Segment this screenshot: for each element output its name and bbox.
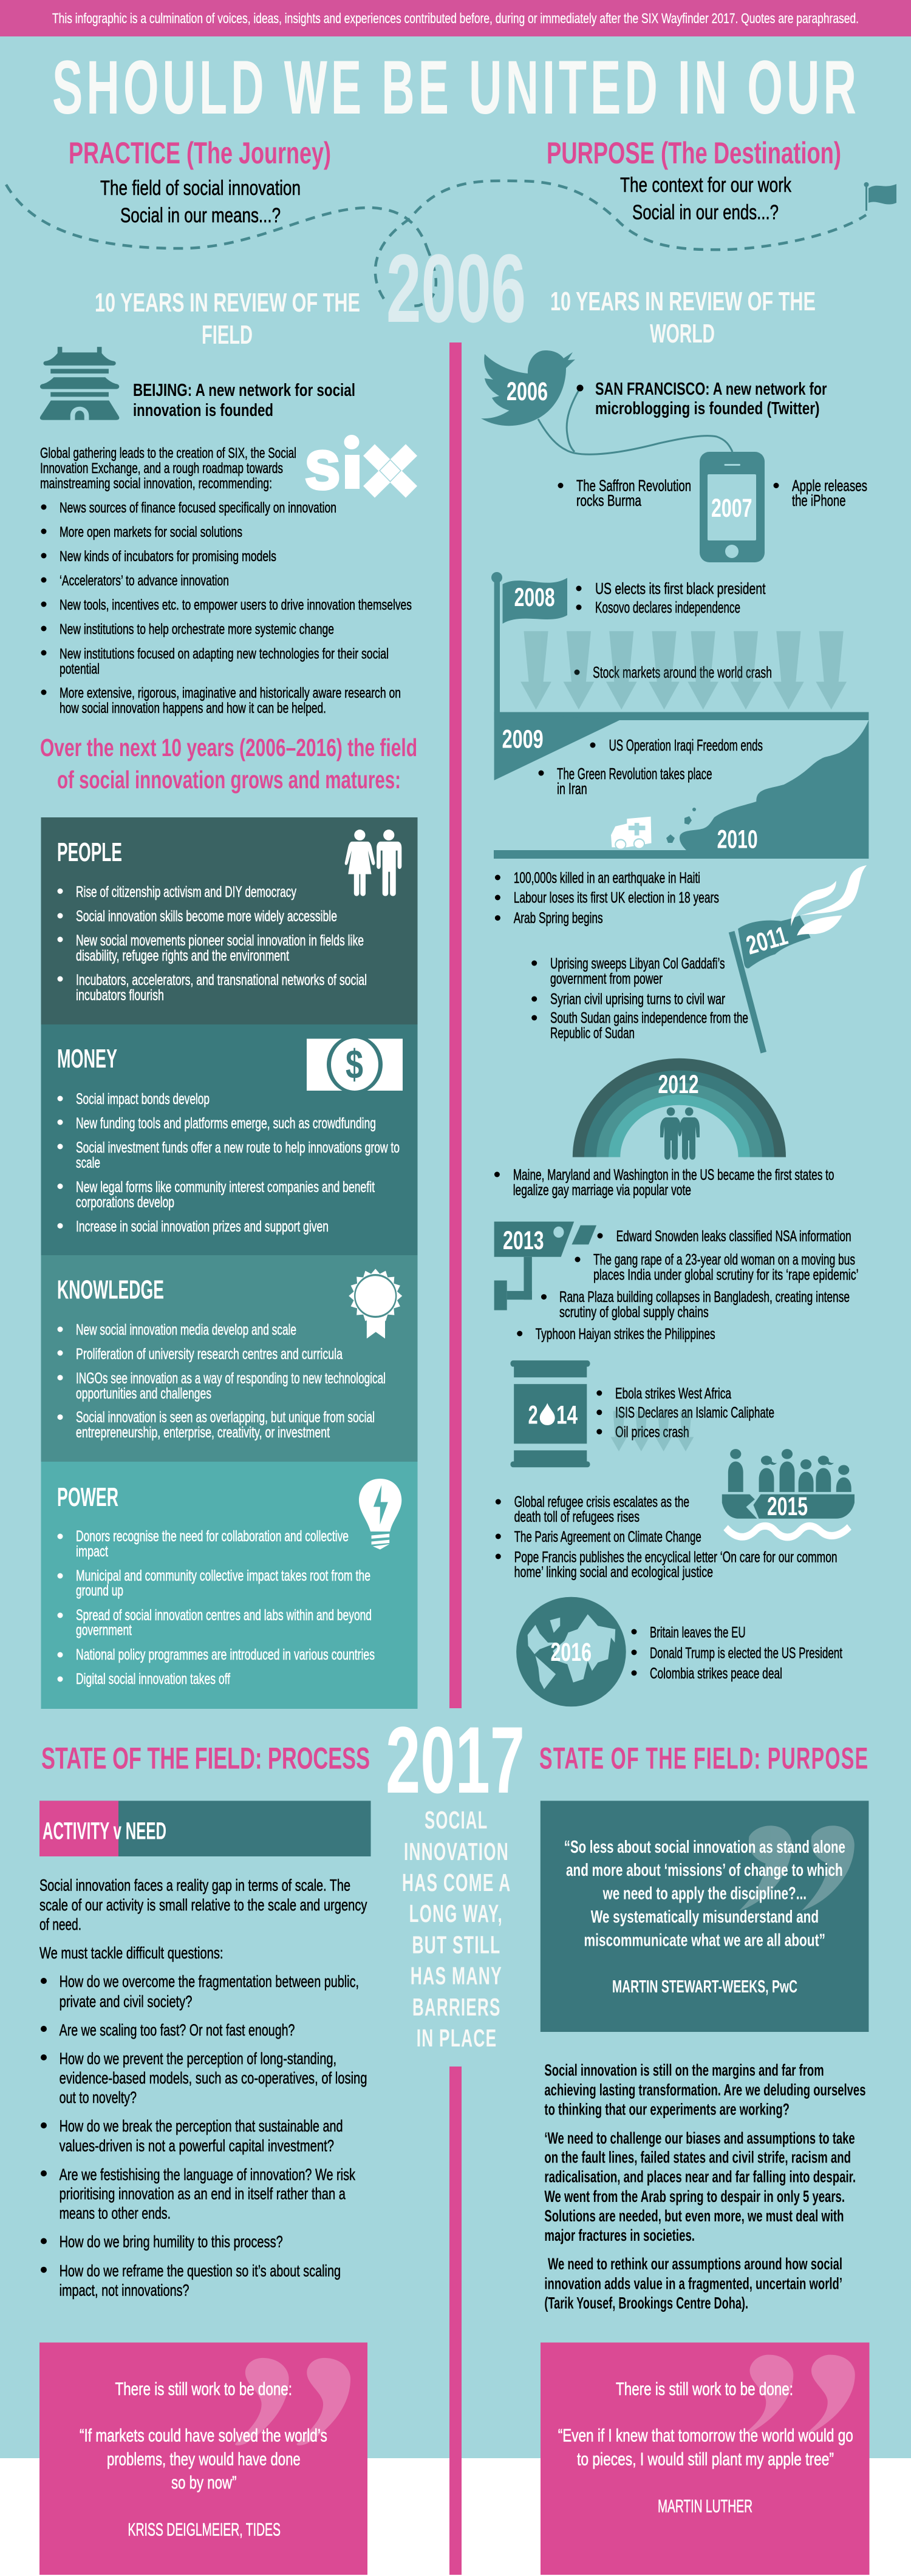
text: Beijing: BEIJING: A new network for social xyxy=(133,381,355,400)
list: difficult questions: How do we bring humility to this process? xyxy=(60,2233,283,2251)
quote text xyxy=(80,2379,327,2540)
list: people: disability, refugee rights and the environment xyxy=(76,947,289,964)
quote text xyxy=(558,2379,853,2516)
text: Beijing: innovation is founded xyxy=(133,401,273,420)
icon: 2008 flag and 2009 platform: 2009 xyxy=(502,725,544,754)
icon: 2016 globe xyxy=(516,1597,626,1706)
list: difficult questions: prioritising innovation as an end in itself rather than a xyxy=(60,2185,346,2203)
statement: barriers: IN PLACE xyxy=(417,2024,497,2052)
centre timeline bar xyxy=(449,342,462,1708)
list: difficult questions: out to novelty? xyxy=(60,2088,137,2107)
icon: 2012 rainbow xyxy=(573,1058,786,1160)
statement: barriers: HAS MANY xyxy=(411,1962,502,1990)
quote text xyxy=(564,1838,845,1997)
text: 2014 events: Ebola strikes West Africa xyxy=(615,1385,731,1402)
list: difficult questions: impact, not innovations? xyxy=(60,2281,189,2299)
list: difficult questions: How do we break the perception that sustainable and xyxy=(60,2117,343,2135)
heading: next 10 years: of social innovation grows and matures: xyxy=(57,766,401,794)
bar: activity v need: ACTIVITY v NEED xyxy=(43,1818,166,1845)
quote text: MARTIN STEWART-WEEKS, PwC xyxy=(612,1977,797,1997)
text: 2013 events: scrutiny of global supply chains xyxy=(559,1304,709,1321)
text: 2014 events: Oil prices crash xyxy=(615,1423,689,1440)
heading: world review: WORLD xyxy=(650,319,715,349)
quote text: so by now” xyxy=(171,2473,237,2493)
panel: power xyxy=(41,1462,418,1709)
panel: Martin Luther quote xyxy=(541,2343,870,2575)
icon: 2006 Twitter bird: 2006 xyxy=(507,377,548,406)
quote text: to pieces, I would still plant my apple tree” xyxy=(577,2450,834,2469)
icon: light bulb xyxy=(359,1479,401,1550)
text: 2008 events: Kosovo declares independence xyxy=(595,598,740,616)
arrows: falling markets xyxy=(520,631,847,710)
statement: barriers: SOCIAL xyxy=(425,1806,488,1834)
list: knowledge xyxy=(57,1321,386,1441)
heading: next 10 years xyxy=(40,734,417,794)
text: 2014 events xyxy=(596,1385,774,1440)
list: power: Municipal and community collective impact takes root from the xyxy=(76,1567,370,1584)
icon: 2010 earthquake hill: 2010 xyxy=(717,825,758,854)
icon: 2011 flag with flames xyxy=(729,865,867,1054)
text: margins: to thinking that our experiments are working? xyxy=(544,2101,790,2119)
icon: 2014 oil barrel xyxy=(510,1360,590,1467)
quote text: We systematically misunderstand and xyxy=(591,1907,819,1927)
heading: next 10 years: Over the next 10 years (2006–2016) the field xyxy=(40,734,417,762)
list: power: National policy programmes are introduced in various countries xyxy=(76,1646,375,1663)
text: San Francisco xyxy=(577,380,827,418)
icon: 2007 phone xyxy=(700,452,765,562)
statement: barriers xyxy=(402,1806,511,2052)
icon: 2013 surveillance camera: 2013 xyxy=(503,1226,544,1255)
statement: barriers: INNOVATION xyxy=(404,1838,509,1866)
text: San Francisco: SAN FRANCISCO: A new network for xyxy=(595,380,827,399)
text: reality gap: We must tackle difficult questions: xyxy=(39,1944,223,1962)
text: 2007 events: rocks Burma xyxy=(576,491,641,509)
top banner xyxy=(0,0,911,36)
text: 2011 events: Uprising sweeps Libyan Col Gaddafi’s xyxy=(550,955,725,972)
text: Global gathering xyxy=(40,445,296,492)
list: recommendations: News sources of finance focused specifically on innovation xyxy=(60,500,336,516)
logo: SIX xyxy=(304,425,412,504)
list: recommendations: how social innovation happens and how it can be helped. xyxy=(60,700,326,717)
icon: couple holding hands xyxy=(660,1108,700,1160)
text: 2011 events: Syrian civil uprising turns to civil war xyxy=(550,991,725,1008)
icon: 2015 refugee boat: 2015 xyxy=(767,1492,808,1521)
list: power: Digital social innovation takes off xyxy=(76,1671,230,1688)
text: 2009 events xyxy=(538,736,763,798)
text: 2012 event xyxy=(494,1167,834,1199)
quote mark xyxy=(235,2358,350,2445)
heading: practice: PRACTICE (The Journey) xyxy=(69,136,331,170)
heading: field review xyxy=(95,288,360,350)
icon: 2016 globe: 2016 xyxy=(550,1638,592,1667)
list: difficult questions: private and civil society? xyxy=(60,1992,192,2011)
list: difficult questions: Are we festishising the language of innovation? We risk xyxy=(60,2165,355,2184)
list: money: scale xyxy=(76,1154,100,1171)
list: recommendations: potential xyxy=(60,661,100,678)
text: 2007 events: The Saffron Revolution xyxy=(576,477,691,495)
lower timeline bar xyxy=(449,2067,462,2575)
list: money: Increase in social innovation prizes and support given xyxy=(76,1218,329,1235)
text: 2008 events: US elects its first black president xyxy=(595,579,766,598)
icon: 2015 refugee boat xyxy=(722,1449,855,1537)
dashed journey path xyxy=(6,181,866,299)
text: 2009 events: The Green Revolution takes place xyxy=(557,765,712,783)
list: money: New legal forms like community interest companies and benefit xyxy=(76,1179,375,1196)
text: 2013 events xyxy=(517,1228,859,1343)
panel: money: MONEY xyxy=(57,1044,117,1074)
heading: field review: 10 YEARS IN REVIEW OF THE xyxy=(95,288,360,318)
text: 2011 events: Republic of Sudan xyxy=(550,1025,635,1042)
list: power: Spread of social innovation centres and labs within and beyond xyxy=(76,1607,372,1624)
arrows: oil price fall xyxy=(611,1411,694,1451)
list: power: impact xyxy=(76,1543,108,1560)
list: recommendations: More extensive, rigorous, imaginative and historically aware research on xyxy=(60,685,401,701)
text: 2011 events xyxy=(531,955,748,1042)
panel: Martin Stewart-Weeks quote xyxy=(541,1801,868,2032)
panel: knowledge xyxy=(41,1255,418,1462)
wire from bird to phone xyxy=(538,388,732,454)
text: 2007 events: Apple releases xyxy=(792,477,867,495)
list: recommendations: New institutions to help orchestrate more systemic change xyxy=(60,621,334,638)
text: 2015 events xyxy=(496,1494,838,1581)
heading: field review: FIELD xyxy=(202,320,253,350)
text: 2007 events xyxy=(558,477,867,509)
list: power: government xyxy=(76,1621,132,1638)
text: Global gathering: Global gathering leads to the creation of SIX, the Social xyxy=(40,445,296,462)
icon: 2008 flag and 2009 platform: 2008 xyxy=(514,583,555,612)
list: difficult questions: evidence-based models, such as co-operatives, of losing xyxy=(60,2069,367,2087)
list: difficult questions: values-driven is not a powerful capital investment? xyxy=(60,2137,334,2155)
icon: 2014 oil barrel: 14 xyxy=(556,1400,578,1429)
text: reality gap: scale of our activity is small relative to the scale and urgency xyxy=(39,1896,367,1914)
heading: purpose xyxy=(547,136,841,224)
icon: 2011 flag with flames: 2011 xyxy=(743,921,791,961)
panel: money xyxy=(41,1024,418,1255)
list: difficult questions: How do we prevent the perception of long-standing, xyxy=(60,2050,336,2068)
text: Global gathering: mainstreaming social innovation, recommending: xyxy=(40,475,272,492)
list: knowledge: entrepreneurship, enterprise, creativity, or investment xyxy=(76,1424,330,1441)
text: 2016 events: Colombia strikes peace deal xyxy=(650,1665,782,1682)
list: power xyxy=(57,1528,375,1688)
list: difficult questions: means to other ends. xyxy=(60,2204,171,2223)
text: 2009 events: US Operation Iraqi Freedom ends xyxy=(609,736,763,754)
statement: barriers: HAS COME A xyxy=(402,1869,511,1896)
text: 2011 events: South Sudan gains independence from the xyxy=(550,1010,748,1027)
list: difficult questions: How do we reframe the question so it’s about scaling xyxy=(60,2262,341,2280)
text: 2013 events: Typhoon Haiyan strikes the Philippines xyxy=(536,1326,715,1343)
text: reality gap: of need. xyxy=(39,1915,81,1934)
quote text: “If markets could have solved the world’s xyxy=(80,2426,327,2446)
text: 2016 events: Britain leaves the EU xyxy=(650,1624,746,1641)
statement: barriers: BARRIERS xyxy=(412,1993,500,2021)
text: 2011 events: government from power xyxy=(550,970,663,987)
text: 2015 events: Global refugee crisis escalates as the xyxy=(514,1494,689,1511)
text: San Francisco: microblogging is founded (Twitter) xyxy=(595,399,820,418)
text: 2008 crash: Stock markets around the world crash xyxy=(593,663,772,681)
panel: people xyxy=(41,817,418,1024)
list: money: Social impact bonds develop xyxy=(76,1091,210,1108)
quote mark xyxy=(746,2355,855,2433)
heading: practice: The field of social innovation xyxy=(100,177,301,200)
list: recommendations xyxy=(41,500,412,717)
list: money: corporations develop xyxy=(76,1194,174,1211)
text: 2008 events xyxy=(576,579,766,616)
list: recommendations: ‘Accelerators’ to advance innovation xyxy=(60,573,229,589)
list: people: Rise of citizenship activism and DIY democracy xyxy=(76,884,296,901)
year 2006: 2006 xyxy=(386,234,526,342)
list: people: Incubators, accelerators, and transnational networks of social xyxy=(76,972,367,989)
icon: 2014 oil barrel: 2 xyxy=(528,1400,538,1429)
heading: practice: Social in our means...? xyxy=(120,204,281,227)
list: recommendations: New institutions focused on adapting new technologies for their social xyxy=(60,646,389,662)
icon: ambulance xyxy=(611,817,652,850)
text: 2016 events xyxy=(632,1624,842,1682)
list: knowledge: opportunities and challenges xyxy=(76,1385,211,1402)
icon: destination flag xyxy=(864,182,896,211)
heading: world review xyxy=(550,287,816,349)
icon: 2013 surveillance camera xyxy=(494,1222,596,1310)
list: people xyxy=(57,884,367,1004)
text: 2015 events: death toll of refugees rises xyxy=(514,1508,640,1525)
text: challenge biases: major fractures in societies. xyxy=(544,2226,695,2244)
quote text: we need to apply the discipline?... xyxy=(602,1884,807,1903)
list: difficult questions xyxy=(41,1972,367,2299)
text: 2010 events: 100,000s killed in an earthquake in Haiti xyxy=(514,870,700,887)
text: 2012 event: legalize gay marriage via popular vote xyxy=(513,1182,691,1199)
quote text: There is still work to be done: xyxy=(115,2379,292,2399)
quote mark xyxy=(739,1825,855,1911)
bar: activity v need xyxy=(39,1801,370,1856)
quote text: MARTIN LUTHER xyxy=(658,2496,752,2516)
list: money: New funding tools and platforms emerge, such as crowdfunding xyxy=(76,1115,376,1132)
heading: purpose: The context for our work xyxy=(620,174,792,197)
icon: 2006 Twitter bird xyxy=(481,350,575,426)
list: people: Social innovation skills become more widely accessible xyxy=(76,908,337,925)
list: knowledge: Proliferation of university research centres and curricula xyxy=(76,1346,343,1363)
icon: 2010 earthquake hill xyxy=(494,720,868,859)
list: recommendations: New kinds of incubators for promising models xyxy=(60,548,276,565)
quote text: KRISS DEIGLMEIER, TIDES xyxy=(128,2520,281,2540)
heading: state of the field process: STATE OF THE FIELD: PROCESS xyxy=(41,1742,370,1776)
year 2006 xyxy=(386,234,526,342)
icon: 2008 flag and 2009 platform xyxy=(491,572,868,780)
list: recommendations: New tools, incentives etc. to empower users to drive innovation themselves xyxy=(60,597,412,613)
text: 2010 events: Arab Spring begins xyxy=(514,910,603,927)
heading: practice xyxy=(69,136,331,227)
list: power: ground up xyxy=(76,1583,123,1600)
list: knowledge: New social innovation media develop and scale xyxy=(76,1321,296,1338)
text: 2010 events: Labour loses its first UK election in 18 years xyxy=(514,890,719,907)
icon: Beijing pagoda xyxy=(40,347,119,420)
icon: rosette xyxy=(349,1269,402,1338)
text: challenge biases xyxy=(544,2129,856,2244)
icon: 2007 phone: 2007 xyxy=(711,494,752,523)
list: money xyxy=(57,1091,400,1235)
text: 2008 crash xyxy=(575,663,772,681)
list: money: Social investment funds offer a new route to help innovations grow to xyxy=(76,1139,400,1156)
list: knowledge: INGOs see innovation as a way of responding to new technological xyxy=(76,1370,386,1387)
text: 2009 events: in Iran xyxy=(557,780,587,798)
logo: SIX: s xyxy=(304,425,341,504)
panel: Kriss Deiglmeier quote xyxy=(39,2343,367,2575)
text: rethink assumptions xyxy=(544,2255,842,2312)
statement: barriers: BUT STILL xyxy=(412,1931,500,1959)
text: 2015 events: home’ linking social and ecological justice xyxy=(514,1564,713,1581)
text: 2007 events: the iPhone xyxy=(792,491,845,509)
list: power: Donors recognise the need for collaboration and collective xyxy=(76,1528,349,1545)
text: 2015 events: The Paris Agreement on Climate Change xyxy=(514,1528,701,1545)
list: difficult questions: Are we scaling too fast? Or not fast enough? xyxy=(60,2021,295,2039)
panel: power: POWER xyxy=(57,1482,118,1512)
quote text: problems, they would have done xyxy=(107,2450,301,2469)
icon: 2012 rainbow: 2012 xyxy=(658,1070,698,1099)
statement: barriers: LONG WAY, xyxy=(409,1900,503,1927)
text: rethink assumptions: (Tarik Yousef, Brookings Centre Doha). xyxy=(544,2294,748,2312)
year 2017: 2017 xyxy=(386,1708,525,1813)
list: people: New social movements pioneer social innovation in fields like xyxy=(76,932,364,949)
list: difficult questions: How do we overcome the fragmentation between public, xyxy=(60,1972,359,1991)
panel: people: PEOPLE xyxy=(57,837,122,867)
text: reality gap: Social innovation faces a reality gap in terms of scale. The xyxy=(39,1876,350,1894)
quote text: miscommunicate what we are all about” xyxy=(584,1931,825,1951)
text: 2010 events xyxy=(495,870,719,927)
icon: woman and man xyxy=(345,830,401,896)
icon: banknote: $ xyxy=(346,1041,363,1088)
list: knowledge: Social innovation is seen as overlapping, but unique from social xyxy=(76,1409,375,1426)
text: Global gathering: Innovation Exchange, and a rough roadmap towards xyxy=(40,460,283,477)
panel: knowledge: KNOWLEDGE xyxy=(57,1275,164,1304)
text: 2014 events: ISIS Declares an Islamic Caliphate xyxy=(615,1405,774,1422)
list: people: incubators flourish xyxy=(76,987,164,1004)
heading: purpose: Social in our ends...? xyxy=(632,201,779,224)
list: recommendations: More open markets for social solutions xyxy=(60,524,242,540)
quote text: There is still work to be done: xyxy=(616,2379,793,2399)
icon: banknote xyxy=(307,1035,403,1094)
text: reality gap xyxy=(39,1876,367,1962)
text: margins xyxy=(544,2061,866,2119)
text: Beijing xyxy=(133,381,355,420)
